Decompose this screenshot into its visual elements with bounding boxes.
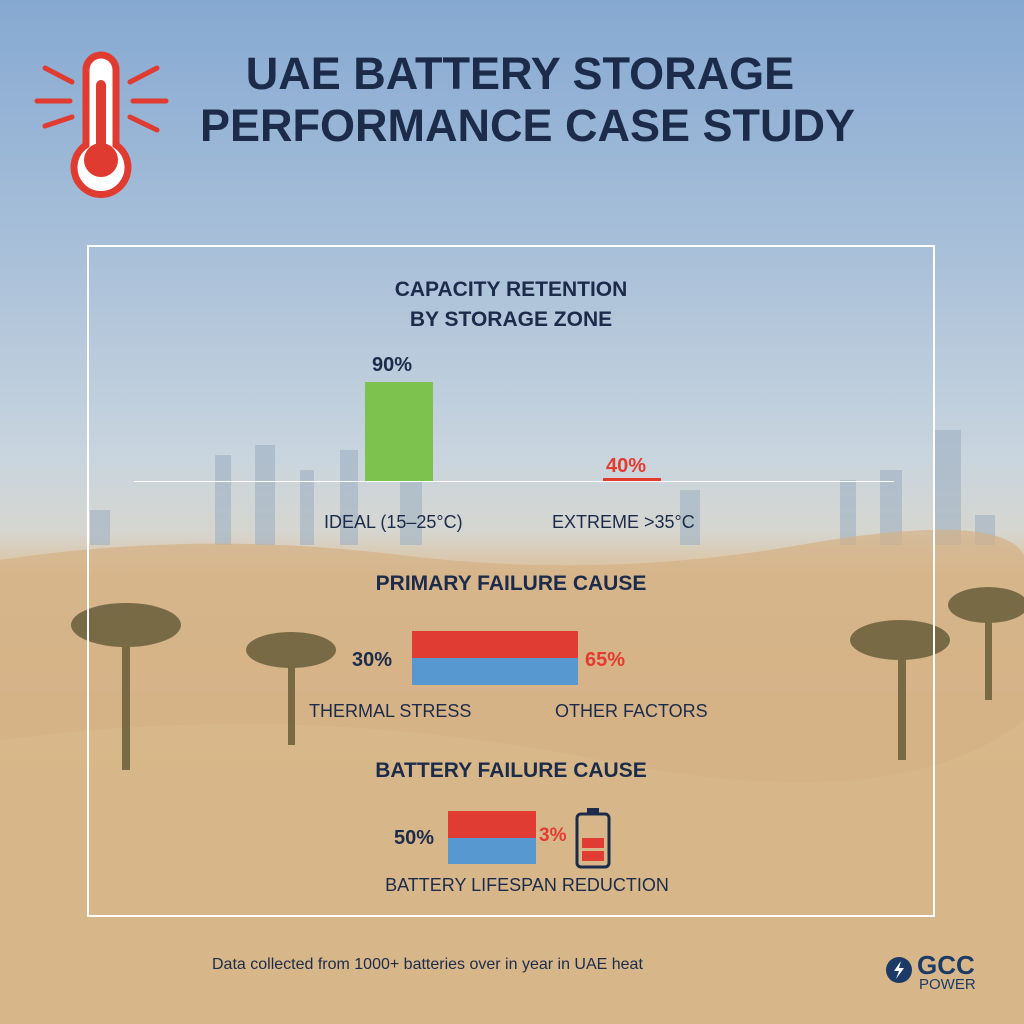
bar: primary failure: 30% — [352, 649, 392, 671]
panel: main frame — [87, 245, 935, 917]
title: PERFORMANCE CASE STUDY — [200, 100, 855, 151]
bar: primary failure: OTHER FACTORS — [555, 701, 708, 721]
bar: battery failure: BATTERY LIFESPAN REDUCTION — [385, 875, 669, 895]
heading: capacity retention: BY STORAGE ZONE — [410, 308, 612, 331]
logo: GCC power: POWER — [919, 976, 976, 993]
title — [200, 48, 855, 151]
bar chart: capacity: 40% — [606, 455, 646, 477]
bar chart: capacity — [134, 354, 894, 532]
footer note: Data collected from 1000+ batteries over in year in UAE heat — [212, 956, 643, 973]
bar chart: capacity: 90% — [372, 354, 412, 376]
logo: GCC power: GCC — [917, 950, 975, 980]
heading: battery failure cause: BATTERY FAILURE CAUSE — [375, 759, 647, 782]
heading: primary failure cause: PRIMARY FAILURE CAUSE — [376, 572, 646, 595]
icon: battery — [576, 808, 610, 868]
bar: battery failure — [385, 808, 669, 895]
heading: capacity retention — [395, 278, 627, 331]
logo: GCC power — [886, 950, 976, 993]
title: UAE BATTERY STORAGE — [246, 48, 794, 99]
bar: primary failure: THERMAL STRESS — [309, 701, 471, 721]
bar chart: capacity: IDEAL (15–25°C) — [324, 512, 463, 532]
heading: capacity retention: CAPACITY RETENTION — [395, 278, 627, 301]
bar: battery failure: 50% — [394, 827, 434, 849]
bar: primary failure — [309, 631, 708, 721]
bar: primary failure: 65% — [585, 649, 625, 671]
icon: thermometer — [34, 52, 168, 198]
bar: battery failure: 3% — [539, 825, 566, 846]
bar chart: capacity: EXTREME >35°C — [552, 512, 695, 532]
